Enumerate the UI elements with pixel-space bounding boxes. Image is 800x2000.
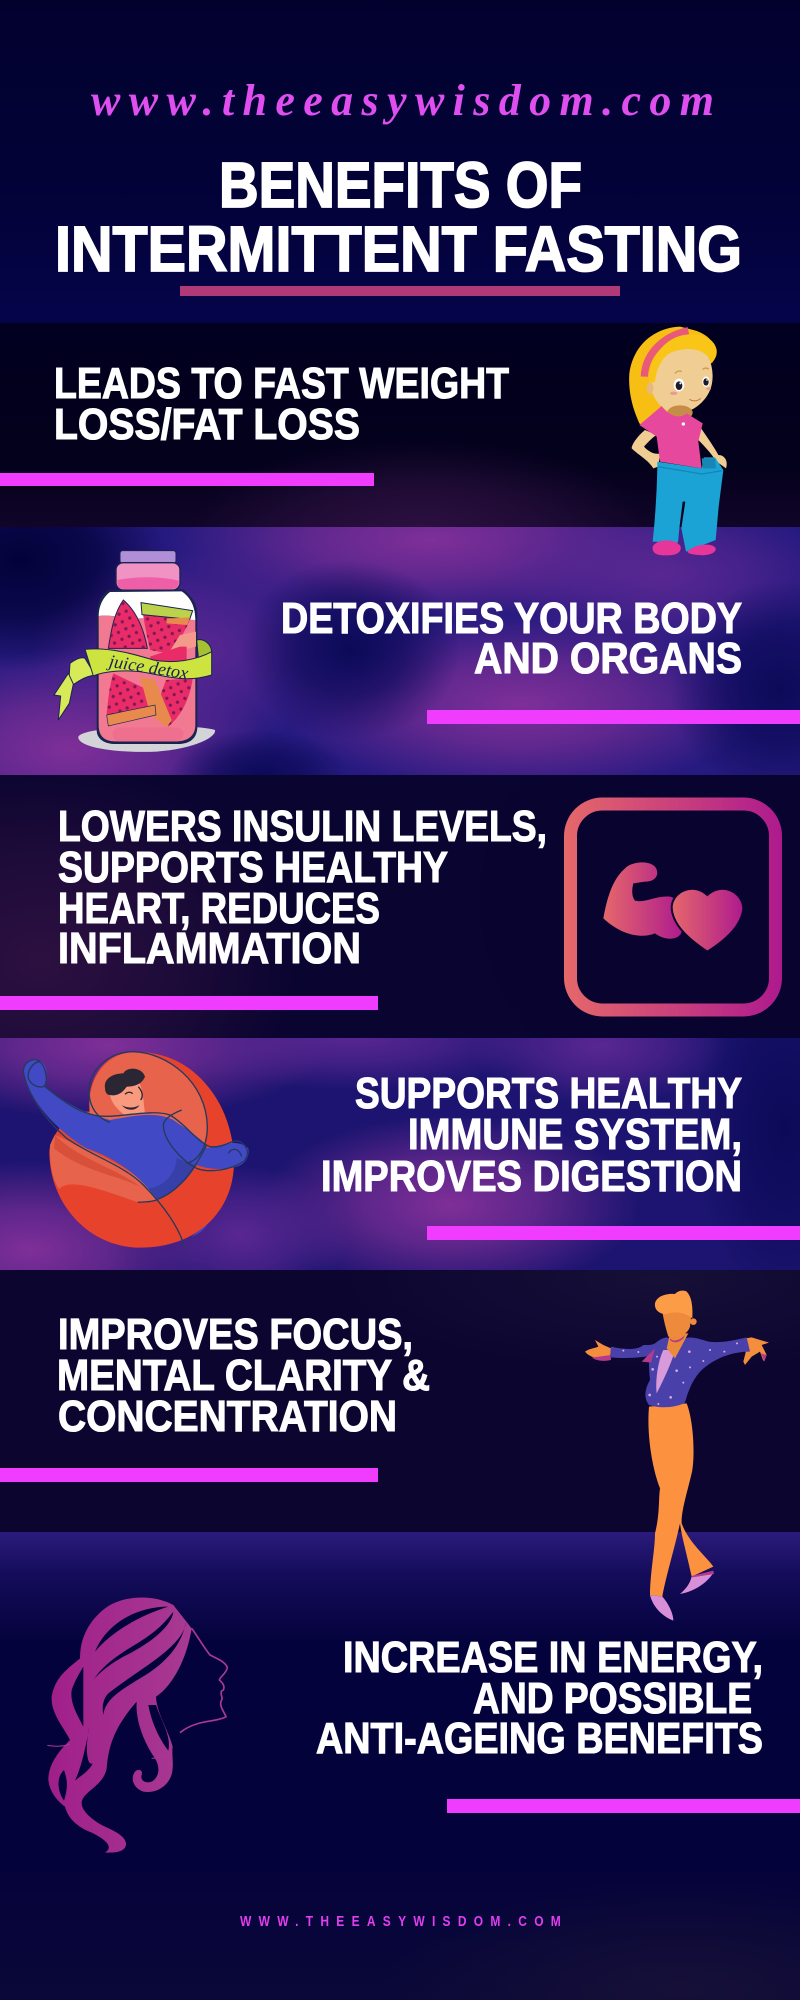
heading: detox: [281, 594, 742, 683]
icon: dancing man: [585, 1291, 769, 1621]
accent bar: [427, 1226, 800, 1240]
icon: muscle and heart: [603, 862, 743, 952]
heading: focus: MENTAL CLARITY &: [57, 1351, 430, 1400]
accent bar: [0, 1468, 378, 1482]
title: INTERMITTENT FASTING: [55, 213, 742, 285]
icon: man in red egg: [23, 1052, 249, 1249]
panel: focus: [0, 1270, 800, 1532]
heading: focus: [57, 1310, 430, 1441]
panel: immune system: [0, 1038, 800, 1270]
heading: insulin: LOWERS INSULIN LEVELS,: [58, 802, 547, 851]
heading: focus: CONCENTRATION: [58, 1392, 397, 1441]
title: [55, 149, 742, 285]
heading: immune: IMMUNE SYSTEM,: [408, 1110, 742, 1159]
icon: girl in oversized jeans: [629, 327, 727, 555]
heading: energy: [316, 1633, 763, 1763]
heading: weight loss: LOSS/FAT LOSS: [54, 400, 360, 449]
panel: insulin and heart: [0, 775, 800, 1038]
panel: fast weight loss: [0, 323, 800, 527]
heading: insulin: INFLAMMATION: [58, 924, 361, 973]
icon: juice detox jar: juice detox: [106, 651, 190, 683]
footer website url: WWW.THEEASYWISDOM.COM: [240, 1913, 561, 1929]
heading: insulin: SUPPORTS HEALTHY: [58, 843, 448, 892]
panel: detox: [0, 527, 800, 775]
title underline: [180, 286, 620, 296]
heading: insulin: [58, 802, 547, 973]
heading: focus: IMPROVES FOCUS,: [58, 1310, 413, 1359]
heading: weight loss: LEADS TO FAST WEIGHT: [54, 359, 509, 408]
icon: rounded frame: [570, 804, 776, 1010]
website url script heading: www.theeasywisdom.com: [91, 76, 714, 125]
accent bar: [427, 710, 800, 724]
accent bar: [0, 996, 378, 1010]
icon: woman hair silhouette: [47, 1597, 227, 1853]
panel: energy and anti-ageing: [0, 1532, 800, 2000]
accent bar: [0, 473, 374, 486]
heading: energy: AND POSSIBLE: [473, 1674, 752, 1723]
heading: detox: AND ORGANS: [474, 634, 742, 683]
heading: immune: [321, 1069, 742, 1201]
title: BENEFITS OF: [219, 149, 582, 221]
heading: immune: IMPROVES DIGESTION: [321, 1152, 742, 1201]
icon: juice detox jar: [54, 551, 215, 752]
accent bar: [447, 1799, 800, 1813]
heading: weight loss: [54, 359, 509, 449]
heading: insulin: HEART, REDUCES: [58, 884, 380, 933]
